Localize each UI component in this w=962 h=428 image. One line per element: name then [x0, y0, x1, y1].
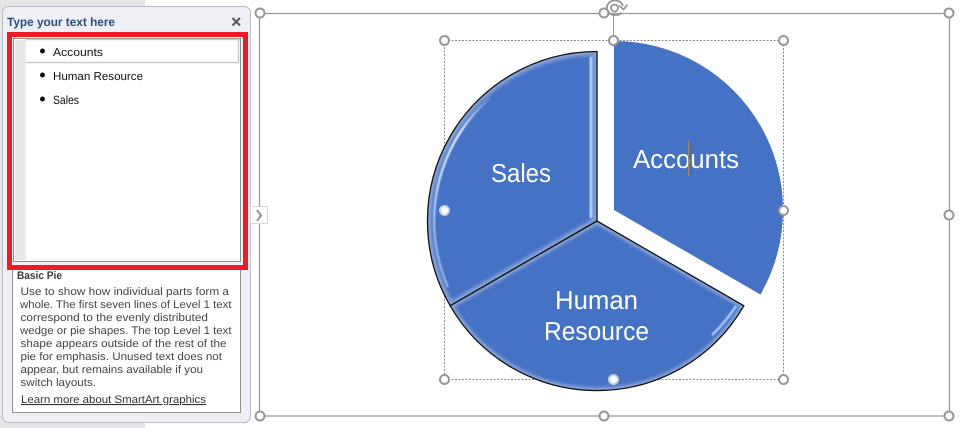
heading: pane title: Type your text here: [7, 15, 115, 29]
description text: wedge or pie shapes. The top Level 1 text: [19, 325, 232, 337]
list item: Sales: [40, 93, 79, 107]
description box: [12, 270, 240, 412]
wedge: Human Resource: [450, 221, 744, 391]
description text: [19, 286, 232, 389]
description text: correspond to the evenly distributed: [20, 312, 208, 324]
icon: collapse tab: [250, 206, 268, 224]
list item: Accounts: Accounts: [53, 47, 103, 59]
description text: appear, but remains available if you: [20, 364, 203, 376]
wedge: Sales: [427, 51, 597, 306]
description text: shape appears outside of the rest of the: [20, 338, 226, 350]
wedge: Accounts: [614, 41, 783, 294]
label: Sales: Sales: [491, 158, 551, 188]
inner selection handles: [440, 36, 788, 384]
help link: Learn more about SmartArt graphics: [21, 394, 207, 406]
pie chart: [427, 41, 783, 391]
icon: rotate handle: [607, 0, 628, 15]
description text: switch layouts.: [20, 377, 96, 389]
red highlight frame: [10, 34, 246, 268]
background strip behind task pane: [0, 0, 145, 428]
description text: whole. The first seven lines of Level 1 text: [19, 299, 232, 311]
outer selection frame: [256, 8, 954, 420]
description text: pie for emphasis. Unused text does not: [20, 351, 222, 363]
label: Human Resource: Human: [555, 285, 638, 315]
text entry box: [14, 38, 240, 262]
panel: text pane: [2, 6, 250, 422]
label: Accounts: Accounts: [633, 144, 739, 174]
label: Human Resource: [544, 285, 649, 346]
icon: close: [232, 18, 240, 26]
label: Human Resource: Resource: [544, 316, 649, 346]
description text: Use to show how individual parts form a: [20, 286, 230, 298]
text caret: [688, 141, 689, 176]
inner selection outline: [444, 40, 784, 380]
description title: Basic Pie: [17, 270, 62, 282]
list item: Sales: Sales: [53, 93, 79, 107]
list item: Human Resource: Human Resource: [53, 71, 143, 83]
